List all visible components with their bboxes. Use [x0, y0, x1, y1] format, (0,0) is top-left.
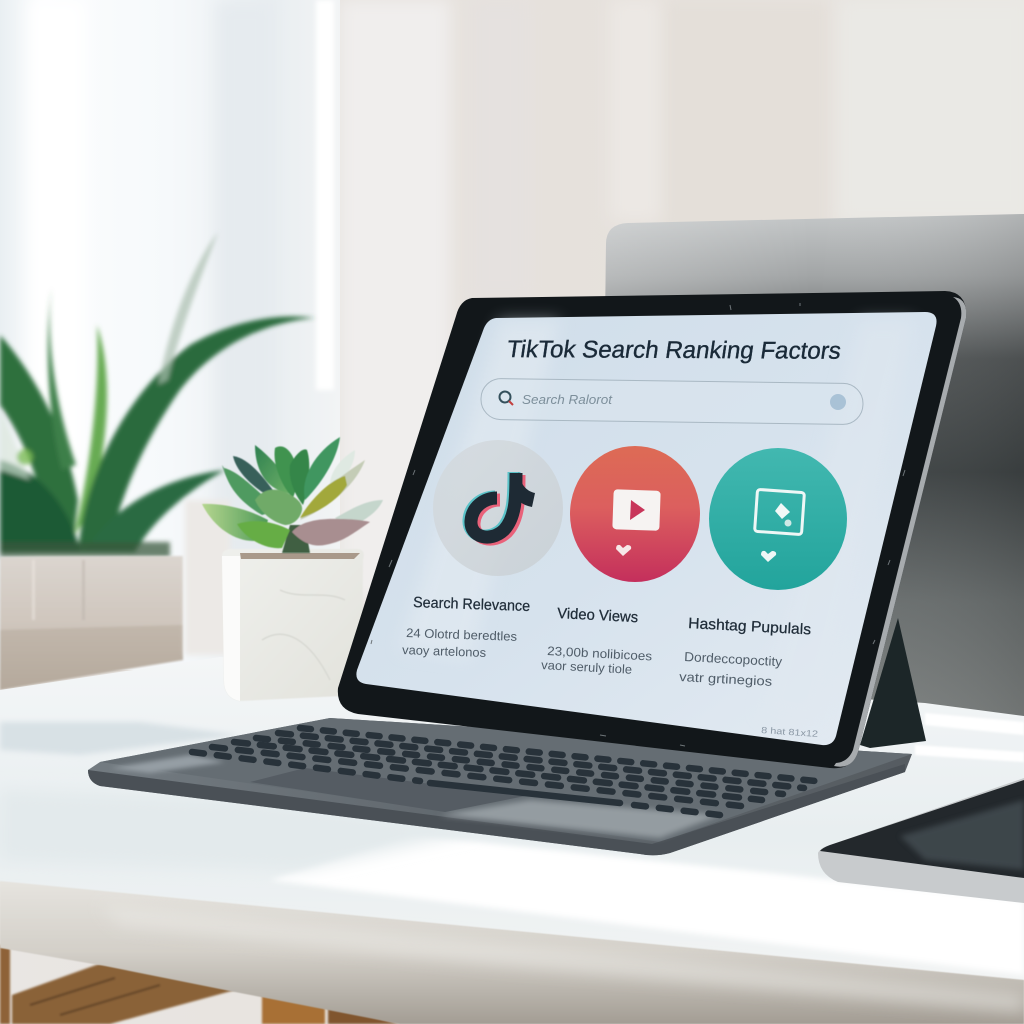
- keyboard folio: [88, 718, 912, 855]
- concrete pot: [0, 556, 183, 690]
- description: vaoy artelonos: [402, 643, 486, 660]
- icon: tiktok note: [469, 472, 535, 539]
- search right button: [830, 394, 846, 410]
- tablet body: [338, 291, 966, 768]
- succulent rosette: [202, 437, 383, 553]
- desk: [0, 657, 1024, 1024]
- kickstand: [860, 618, 926, 748]
- icon: image frame: [755, 489, 804, 535]
- screen footer text: 8 hat 81x12: [761, 725, 818, 739]
- wooden desk legs: [0, 945, 400, 1024]
- search placeholder: Search Ralorot: [522, 392, 613, 407]
- red circle: [570, 446, 700, 582]
- description: [679, 649, 783, 689]
- white square pot: [222, 549, 364, 701]
- search bar: [481, 378, 863, 425]
- trackpad: [250, 768, 525, 812]
- window light and shadow on desk: [0, 713, 1024, 975]
- window curtain: [0, 0, 340, 670]
- screen title: TikTok Search Ranking Factors: [505, 336, 843, 365]
- search icon: [500, 392, 513, 405]
- description: Dordeccopoctity: [684, 649, 783, 669]
- tablet: [338, 291, 966, 768]
- factor: hashtag popularity: [679, 448, 847, 689]
- description: 24 Olotrd beredtles: [406, 626, 517, 644]
- description: 23,00b nolibicoes: [547, 644, 652, 663]
- icon: play tile: [612, 489, 661, 531]
- small succulent in white pot: [202, 437, 383, 701]
- bezel specks: [371, 303, 905, 746]
- description: vaor seruly tiole: [541, 658, 632, 677]
- icon: heart: [761, 551, 776, 562]
- keys: [192, 728, 825, 815]
- desk front edge: [0, 881, 1024, 1024]
- label: Video Views: [557, 605, 639, 626]
- large aloe plant in concrete pot: [0, 232, 315, 690]
- desk top surface: [0, 657, 1024, 980]
- teal circle: [709, 448, 847, 590]
- laptop behind the tablet: [600, 214, 1024, 730]
- icon: heart: [616, 545, 631, 556]
- keyboard base: [88, 718, 912, 855]
- tablet screen: [356, 312, 937, 745]
- aloe leaves: [0, 232, 315, 557]
- factor: search relevance: [402, 440, 563, 660]
- label: Hashtag Pupulals: [688, 615, 812, 638]
- label: Search Relevance: [413, 594, 530, 615]
- grey circle: [433, 440, 563, 576]
- description: [402, 626, 517, 660]
- description: [541, 644, 652, 677]
- phone or small tablet lying on desk: [818, 778, 1024, 903]
- factor: video views: [541, 446, 700, 677]
- description: vatr grtinegios: [679, 669, 773, 689]
